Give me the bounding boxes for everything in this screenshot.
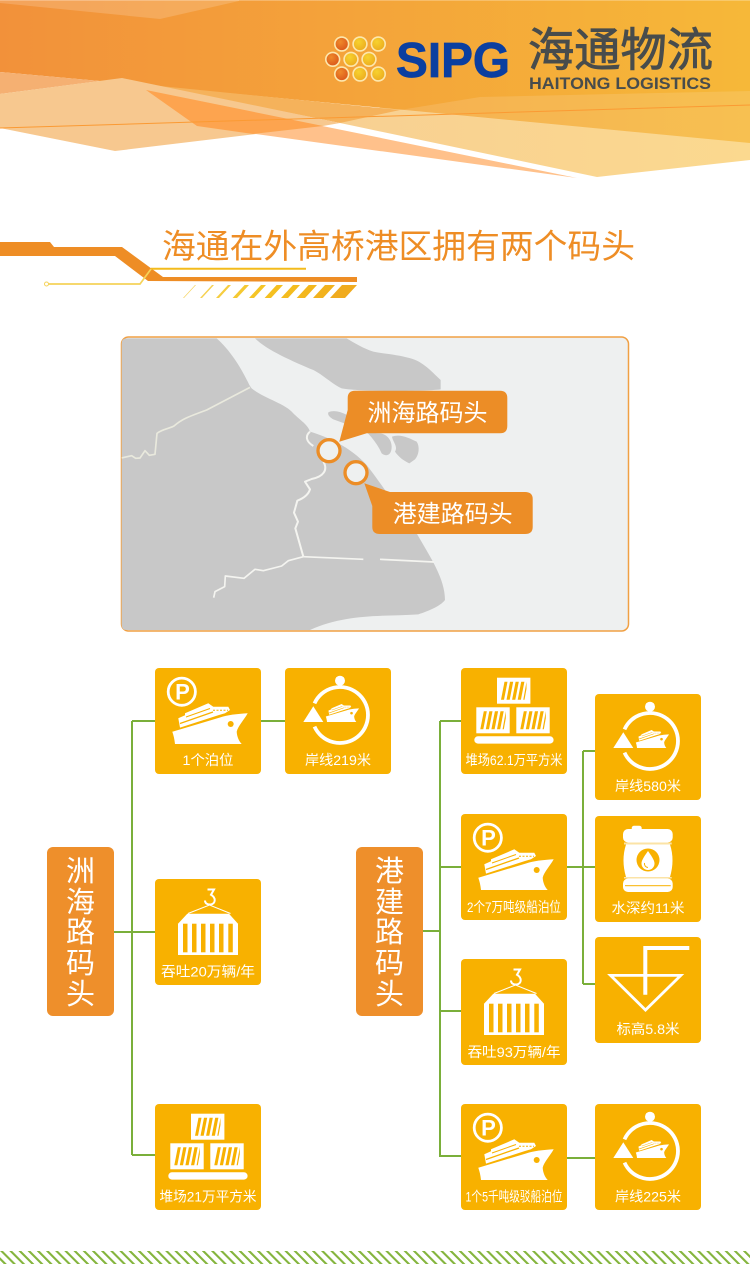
card label: 2个7万吨级船泊位 [467, 899, 561, 915]
card label: 1个泊位 [182, 752, 234, 768]
vertical label: Zhouhai Road wharf: 洲 [66, 856, 95, 888]
vertical label: Gangjian Road wharf: 路 [375, 916, 404, 949]
icon: ship with parking mark [168, 678, 248, 744]
callout: Gangjian Road wharf: 港建路码头 [393, 501, 513, 528]
vertical label: Gangjian Road wharf [356, 847, 423, 1016]
connector lines: Zhouhai Road tree [114, 721, 285, 1155]
map pin: Gangjian Road [345, 462, 367, 484]
logo Chinese name: 海通物流 [528, 24, 713, 76]
title decoration: circuit lines and stripes [0, 242, 357, 298]
card: elevation 5.8 m [595, 937, 701, 1043]
card: quay 580 m [595, 694, 701, 800]
card: yard 210k sqm [155, 1104, 261, 1210]
card label: 吞吐93万辆/年 [468, 1044, 560, 1060]
icon: container on hook [484, 970, 544, 1035]
icon: water barrel with drop [623, 826, 673, 892]
footer stripe band [0, 1251, 750, 1264]
card label: 水深约11米 [612, 900, 684, 916]
vertical label: Gangjian Road wharf: 港 [375, 855, 404, 888]
icon: ship in ring [613, 702, 678, 769]
icon: elevation mark [610, 948, 689, 1010]
vertical label: Gangjian Road wharf: 码 [375, 948, 404, 980]
callout: Gangjian Road wharf [364, 483, 533, 534]
card label: 堆场62.1万平方米 [466, 752, 562, 768]
vertical label: Gangjian Road wharf: 建 [375, 886, 404, 919]
callout: Zhouhai Road wharf [339, 391, 507, 442]
card: throughput 200k vehicles [155, 879, 261, 985]
vertical label: Zhouhai Road wharf [47, 847, 114, 1016]
map pin: Zhouhai Road [318, 440, 340, 462]
logo mark: honeycomb dots [326, 37, 385, 81]
vertical label: Zhouhai Road wharf: 码 [66, 948, 95, 980]
card label: 岸线225米 [615, 1188, 681, 1204]
icon: container on hook [178, 890, 238, 955]
header banner [0, 0, 750, 178]
card: yard 621k sqm [461, 668, 567, 774]
map panel [122, 337, 628, 631]
card: water depth 11 m [595, 816, 701, 922]
card: 1 barge berth 5k ton [461, 1104, 567, 1210]
card label: 堆场21万平方米 [160, 1188, 256, 1204]
icon: stacked containers [474, 678, 554, 744]
card label: 岸线580米 [615, 778, 681, 794]
callout: Zhouhai Road wharf: 洲海路码头 [368, 400, 488, 427]
card label: 1个5千吨级驳船泊位 [466, 1188, 562, 1204]
vertical label: Zhouhai Road wharf: 海 [66, 886, 95, 919]
vertical label: Zhouhai Road wharf: 路 [66, 916, 95, 949]
connector lines: Gangjian Road tree [423, 721, 595, 1158]
card: 2 berths 70k ton [461, 814, 567, 920]
icon: ship in ring [303, 676, 368, 743]
icon: ship in ring [613, 1112, 678, 1179]
card label: 吞吐20万辆/年 [161, 964, 255, 980]
logo SIPG wordmark: SIPG [396, 34, 510, 88]
card label: 标高5.8米 [616, 1021, 680, 1037]
card: quay 225 m [595, 1104, 701, 1210]
vertical label: Gangjian Road wharf: 头 [375, 979, 404, 1011]
card: quay 219 m [285, 668, 391, 774]
card: 1 berth [155, 668, 261, 774]
icon: ship with parking mark [474, 824, 554, 890]
icon: ship with parking mark [474, 1114, 554, 1180]
logo: SIPG Haitong Logistics [326, 24, 713, 93]
logo English name: HAITONG LOGISTICS [529, 75, 711, 93]
vertical label: Zhouhai Road wharf: 头 [66, 979, 95, 1011]
card: throughput 930k vehicles [461, 959, 567, 1065]
icon: stacked containers [168, 1114, 248, 1180]
card label: 岸线219米 [305, 752, 371, 768]
title: 海通在外高桥港区拥有两个码头 [162, 228, 635, 266]
